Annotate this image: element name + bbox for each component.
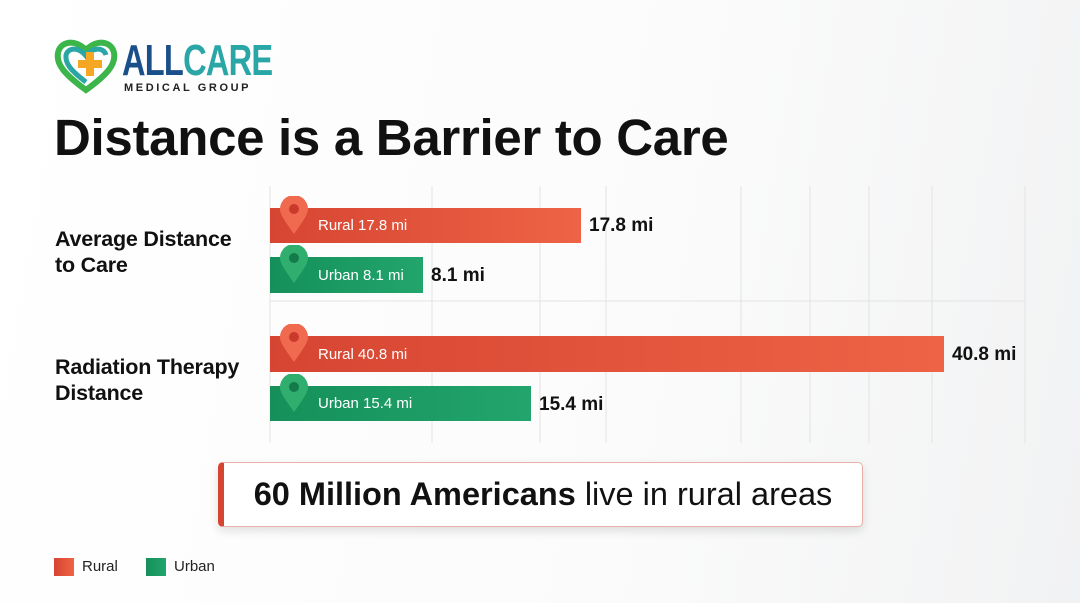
chart: 17.8 mi — [589, 215, 653, 236]
bar: urban 8.1: Urban 8.1 mi — [318, 266, 404, 284]
logo text: ALLCARE — [122, 36, 272, 85]
callout — [218, 462, 863, 527]
logo: MEDICAL GROUP — [124, 82, 251, 94]
label: radiation therapy: Distance — [55, 381, 143, 405]
callout: 60 Million Americans live in rural areas — [254, 476, 832, 512]
label: average distance: Average Distance — [55, 227, 231, 251]
label: radiation therapy: Radiation Therapy — [55, 355, 239, 379]
chart — [55, 186, 1026, 443]
chart: 40.8 mi — [952, 344, 1016, 365]
bar: urban 8.1 — [270, 257, 423, 293]
logo — [54, 36, 272, 94]
bar: urban 15.4 — [270, 386, 531, 421]
chart: 15.4 mi — [539, 394, 603, 415]
chart: 8.1 mi — [431, 265, 485, 286]
label: radiation therapy — [55, 355, 240, 405]
legend: Urban — [174, 558, 215, 575]
legend — [54, 558, 215, 576]
bar: urban 15.4: Urban 15.4 mi — [318, 395, 412, 412]
bar: rural 17.8 — [270, 208, 581, 243]
label: average distance: to Care — [55, 253, 128, 277]
title: Distance is a Barrier to Care — [54, 109, 728, 166]
icon: heart with cross — [54, 40, 118, 94]
legend: Rural — [82, 558, 118, 575]
bar: rural 17.8: Rural 17.8 mi — [318, 217, 407, 234]
bar: rural 40.8: Rural 40.8 mi — [318, 346, 407, 362]
bar: rural 40.8 — [270, 336, 944, 372]
label: average distance — [55, 227, 231, 277]
